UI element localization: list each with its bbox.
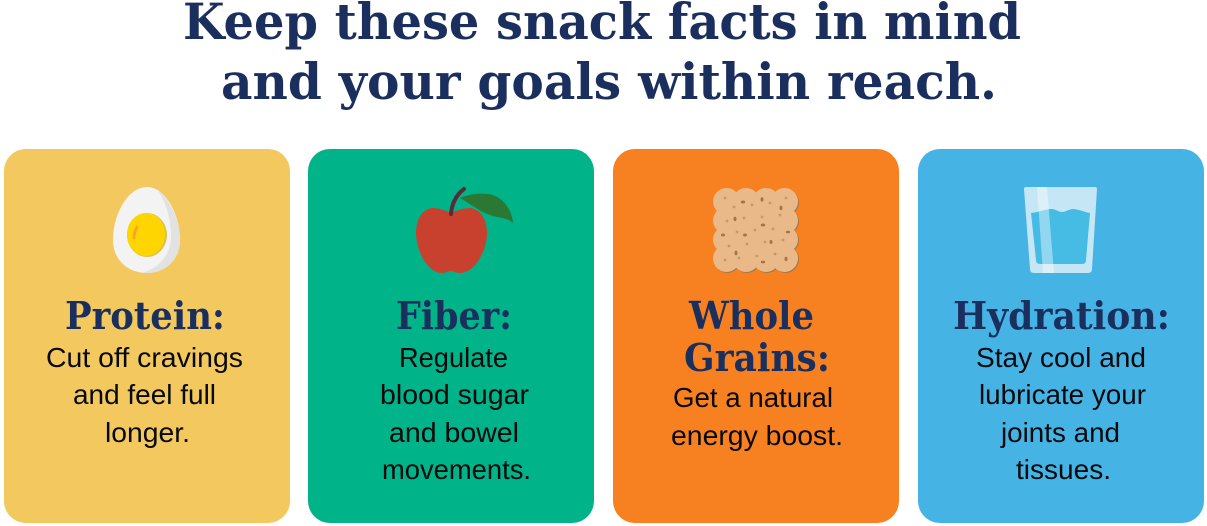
icon: glass of water xyxy=(1024,187,1097,273)
text: protein description: longer. xyxy=(105,417,190,448)
text: hydration description: joints and xyxy=(1000,417,1120,448)
title: and your goals within reach. xyxy=(221,52,997,111)
heading: whole grains: Grains: xyxy=(684,335,830,380)
heading: hydration: Hydration: xyxy=(953,293,1170,338)
text: hydration description xyxy=(976,342,1146,485)
text: protein description xyxy=(46,342,243,448)
text: whole grains description: Get a natural xyxy=(673,382,833,413)
text: hydration description: tissues. xyxy=(1016,454,1111,485)
icon: boiled egg xyxy=(113,187,180,273)
icon: apple xyxy=(416,189,513,273)
panel: hydration xyxy=(918,149,1204,523)
text: hydration description: Stay cool and xyxy=(976,342,1146,373)
title xyxy=(183,0,1021,111)
heading: fiber: Fiber: xyxy=(396,293,512,338)
text: fiber description: blood sugar xyxy=(380,379,529,410)
panel: protein xyxy=(4,149,290,523)
text: whole grains description xyxy=(671,382,843,451)
text: hydration description: lubricate your xyxy=(979,379,1146,410)
text: whole grains description: energy boost. xyxy=(671,420,843,451)
text: fiber description: and bowel xyxy=(389,417,519,448)
text: protein description: and feel full xyxy=(73,379,216,410)
heading: whole grains: Whole xyxy=(688,293,814,338)
icon: cracker xyxy=(713,188,799,273)
heading: protein: Protein: xyxy=(65,293,225,338)
heading: whole grains xyxy=(684,293,830,380)
panel: fiber xyxy=(308,149,594,523)
text: fiber description: Regulate xyxy=(399,342,508,373)
text: protein description: Cut off cravings xyxy=(46,342,243,373)
text: fiber description: movements. xyxy=(382,454,531,485)
panel: whole grains xyxy=(613,149,899,523)
text: fiber description xyxy=(380,342,531,485)
